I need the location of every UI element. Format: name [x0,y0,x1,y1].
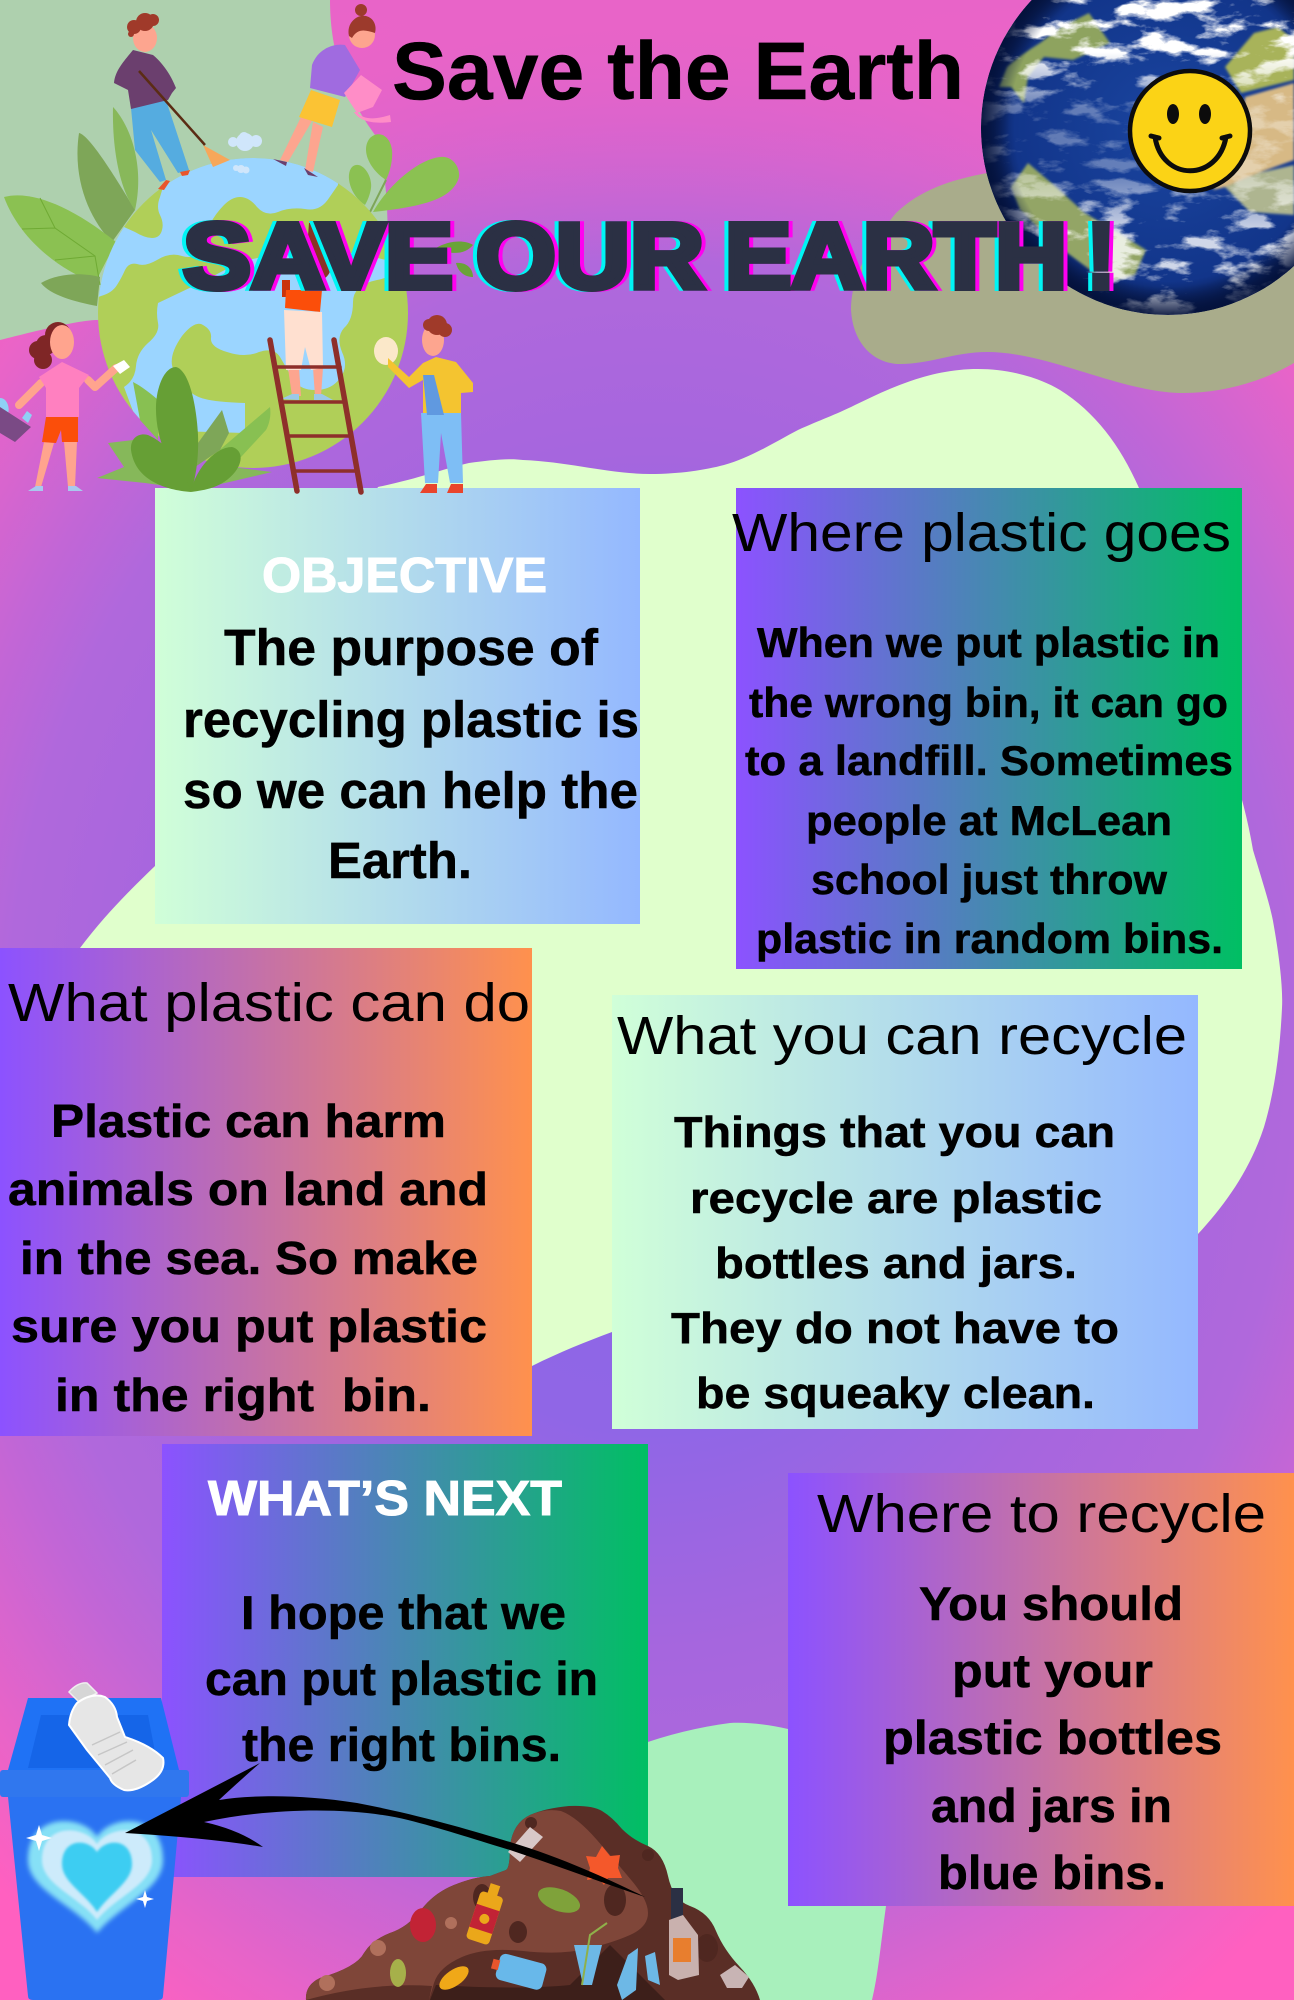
what you can recycle text: Things that you can [674,1108,1115,1157]
what you can recycle text: be squeaky clean. [696,1369,1095,1418]
heading: what plastic can do: What plastic can do [8,973,530,1033]
top [310,45,360,97]
rake handle [139,71,205,145]
where to recycle text: plastic bottles [883,1711,1222,1764]
headline: save our earth: EARTH [729,204,1071,308]
heap back [306,1806,760,2000]
recycling bag [0,407,31,442]
yellow leaf [435,1962,473,1994]
illustration: girl with watering can [273,4,391,177]
right eye [1199,104,1211,124]
bin body [8,1797,181,2000]
headline: save our earth: EARTH [725,204,1067,308]
what you can recycle text: bottles and jars. [715,1239,1077,1288]
panel: where plastic goes [732,488,1242,969]
panel: objective [155,488,640,924]
heading: where plastic goes: Where plastic goes [732,503,1231,563]
title: Save the Earth [392,26,964,117]
illustration: girl with bag [0,322,130,491]
green leaf [535,1882,583,1918]
illustration: garbage heap [306,1806,760,2000]
smiley face [1130,71,1250,191]
orange maple leaf [586,1846,622,1885]
heap front [306,1810,648,2000]
yellow bottle [466,1881,507,1945]
hair [349,4,376,38]
bottles in bag [0,398,32,423]
objective text: recycling plastic is [183,691,639,748]
headline: save our earth: SAVE [179,204,449,308]
what's next text: can put plastic in [205,1652,598,1705]
illustration: boy with rake [114,13,230,190]
headline: save our earth: ! [1087,204,1115,308]
icon: blue recycling bin [0,1698,189,2000]
illustration: boy with spray [374,315,473,493]
what plastic can do text [8,1095,488,1421]
headline: save our earth: ! [1083,204,1111,308]
bottle ribs [92,1732,136,1774]
apron [423,375,444,415]
what you can recycle text [671,1108,1119,1418]
heading: objective: OBJECTIVE [262,549,547,603]
where plastic goes text [745,619,1233,962]
legs [35,442,77,487]
what plastic can do text: in the right bin. [55,1369,431,1421]
bottle cap [69,1683,97,1702]
arrow from heap to bin [125,1763,645,1897]
sparkles [26,1825,154,1908]
where to recycle text: and jars in [931,1779,1172,1832]
hair [29,322,71,369]
hair [305,222,333,278]
objective text: The purpose of [224,619,599,676]
north america [999,13,1110,103]
face [349,22,375,48]
jeans [131,100,189,182]
red apple [410,1908,436,1942]
left eye [1167,104,1179,124]
where to recycle text: You should [919,1577,1183,1630]
watering can [344,75,391,123]
headline: save our earth: ! [1091,204,1119,308]
what plastic can do text: in the sea. So make [20,1232,478,1284]
headline: save our earth [179,204,1119,308]
headline: save our earth: SAVE [183,204,453,308]
africa [1213,83,1294,190]
where plastic goes text: to a landfill. Sometimes [745,737,1233,784]
where to recycle text: blue bins. [938,1846,1166,1899]
heap lower left band [306,1985,432,2000]
what plastic can do text: Plastic can harm [51,1095,446,1147]
rake head [203,145,230,167]
heading: what you can recycle: What you can recycle [617,1006,1187,1066]
toothpaste tube [508,1827,543,1862]
shoes [281,394,333,400]
face [50,325,74,359]
limb shading [981,0,1294,315]
panel: where to recycle [788,1473,1294,1906]
headline: save our earth: SAVE [187,204,457,308]
europe [1225,27,1294,93]
trousers [421,413,463,483]
clouds above globe [228,132,262,174]
what's next text [205,1586,598,1771]
shoes [273,159,318,177]
lid opening [28,1715,158,1768]
heading: what's next: WHAT’S NEXT [208,1472,562,1526]
panel: what's next [162,1444,648,1877]
where plastic goes text: plastic in random bins. [756,915,1223,962]
drink cup [574,1923,607,1985]
where to recycle text [883,1577,1222,1899]
bin rim [0,1770,189,1797]
shorts [299,90,340,127]
where plastic goes text: people at McLean [806,797,1172,844]
illustration: person on ladder [270,222,361,492]
what you can recycle text: They do not have to [671,1304,1119,1353]
mint blob bottom [490,1723,886,2000]
where plastic goes text: school just throw [811,856,1167,903]
objective text [183,619,639,889]
heap spots [473,1817,718,1962]
legs [280,117,323,172]
shoes [158,170,190,190]
headline: save our earth: EARTH [721,204,1063,308]
earth photo [981,0,1294,315]
where to recycle text: put your [952,1644,1153,1697]
what you can recycle text: recycle are plastic [690,1174,1102,1223]
face [422,324,444,356]
south america [1011,163,1146,280]
shoes [28,486,83,491]
pale green blob [80,369,1282,1366]
rock [720,1965,749,1988]
smile [1151,136,1230,171]
cloth [374,337,398,365]
icon: crushed plastic bottle [69,1683,163,1790]
t-shirt [39,362,89,417]
top pink wash [0,0,1294,260]
shirt [285,290,322,312]
white cloth [113,360,130,374]
panel: what plastic can do [0,948,532,1436]
what's next text: the right bins. [242,1718,561,1771]
apple core [390,1959,406,1987]
what plastic can do text: animals on land and [8,1163,488,1215]
what plastic can do text: sure you put plastic [11,1300,487,1352]
bottle body [69,1695,163,1790]
small leaves on globe [436,242,473,277]
where plastic goes text: When we put plastic in [757,619,1220,666]
headline: save our earth: OUR [480,204,708,308]
glass bottle [669,1888,699,1980]
hair [423,315,452,337]
arms [19,368,116,405]
cloud texture [981,0,1294,315]
hoodie [114,50,176,109]
trousers [284,310,323,370]
glass shards [617,1948,660,2000]
sage green blob top left [0,0,388,340]
heading: where to recycle: Where to recycle [817,1484,1266,1544]
illustration: back plants [4,107,459,306]
objective text: Earth. [328,832,472,889]
ladder [270,340,361,492]
illustration: globe [90,150,408,468]
face [133,24,157,52]
blue plastic bottle [489,1951,548,1991]
shorts [42,417,78,443]
land masses [999,13,1294,280]
objective text: so we can help the [183,762,638,819]
hair [127,13,159,37]
arm [282,280,290,297]
legs [288,368,323,396]
headline: save our earth: OUR [476,204,704,308]
headline: save our earth: OUR [472,204,700,308]
panel: what you can recycle [612,995,1198,1429]
bin lid [8,1698,179,1770]
olive blob top right [851,173,1294,393]
southern africa [1225,165,1294,215]
what's next text: I hope that we [241,1586,566,1639]
where plastic goes text: the wrong bin, it can go [749,679,1228,726]
heap shadow [430,1945,665,2000]
glowing heart [28,1821,163,1933]
shoes [420,484,463,493]
illustration: front plants [97,367,272,492]
sweater [388,357,473,413]
